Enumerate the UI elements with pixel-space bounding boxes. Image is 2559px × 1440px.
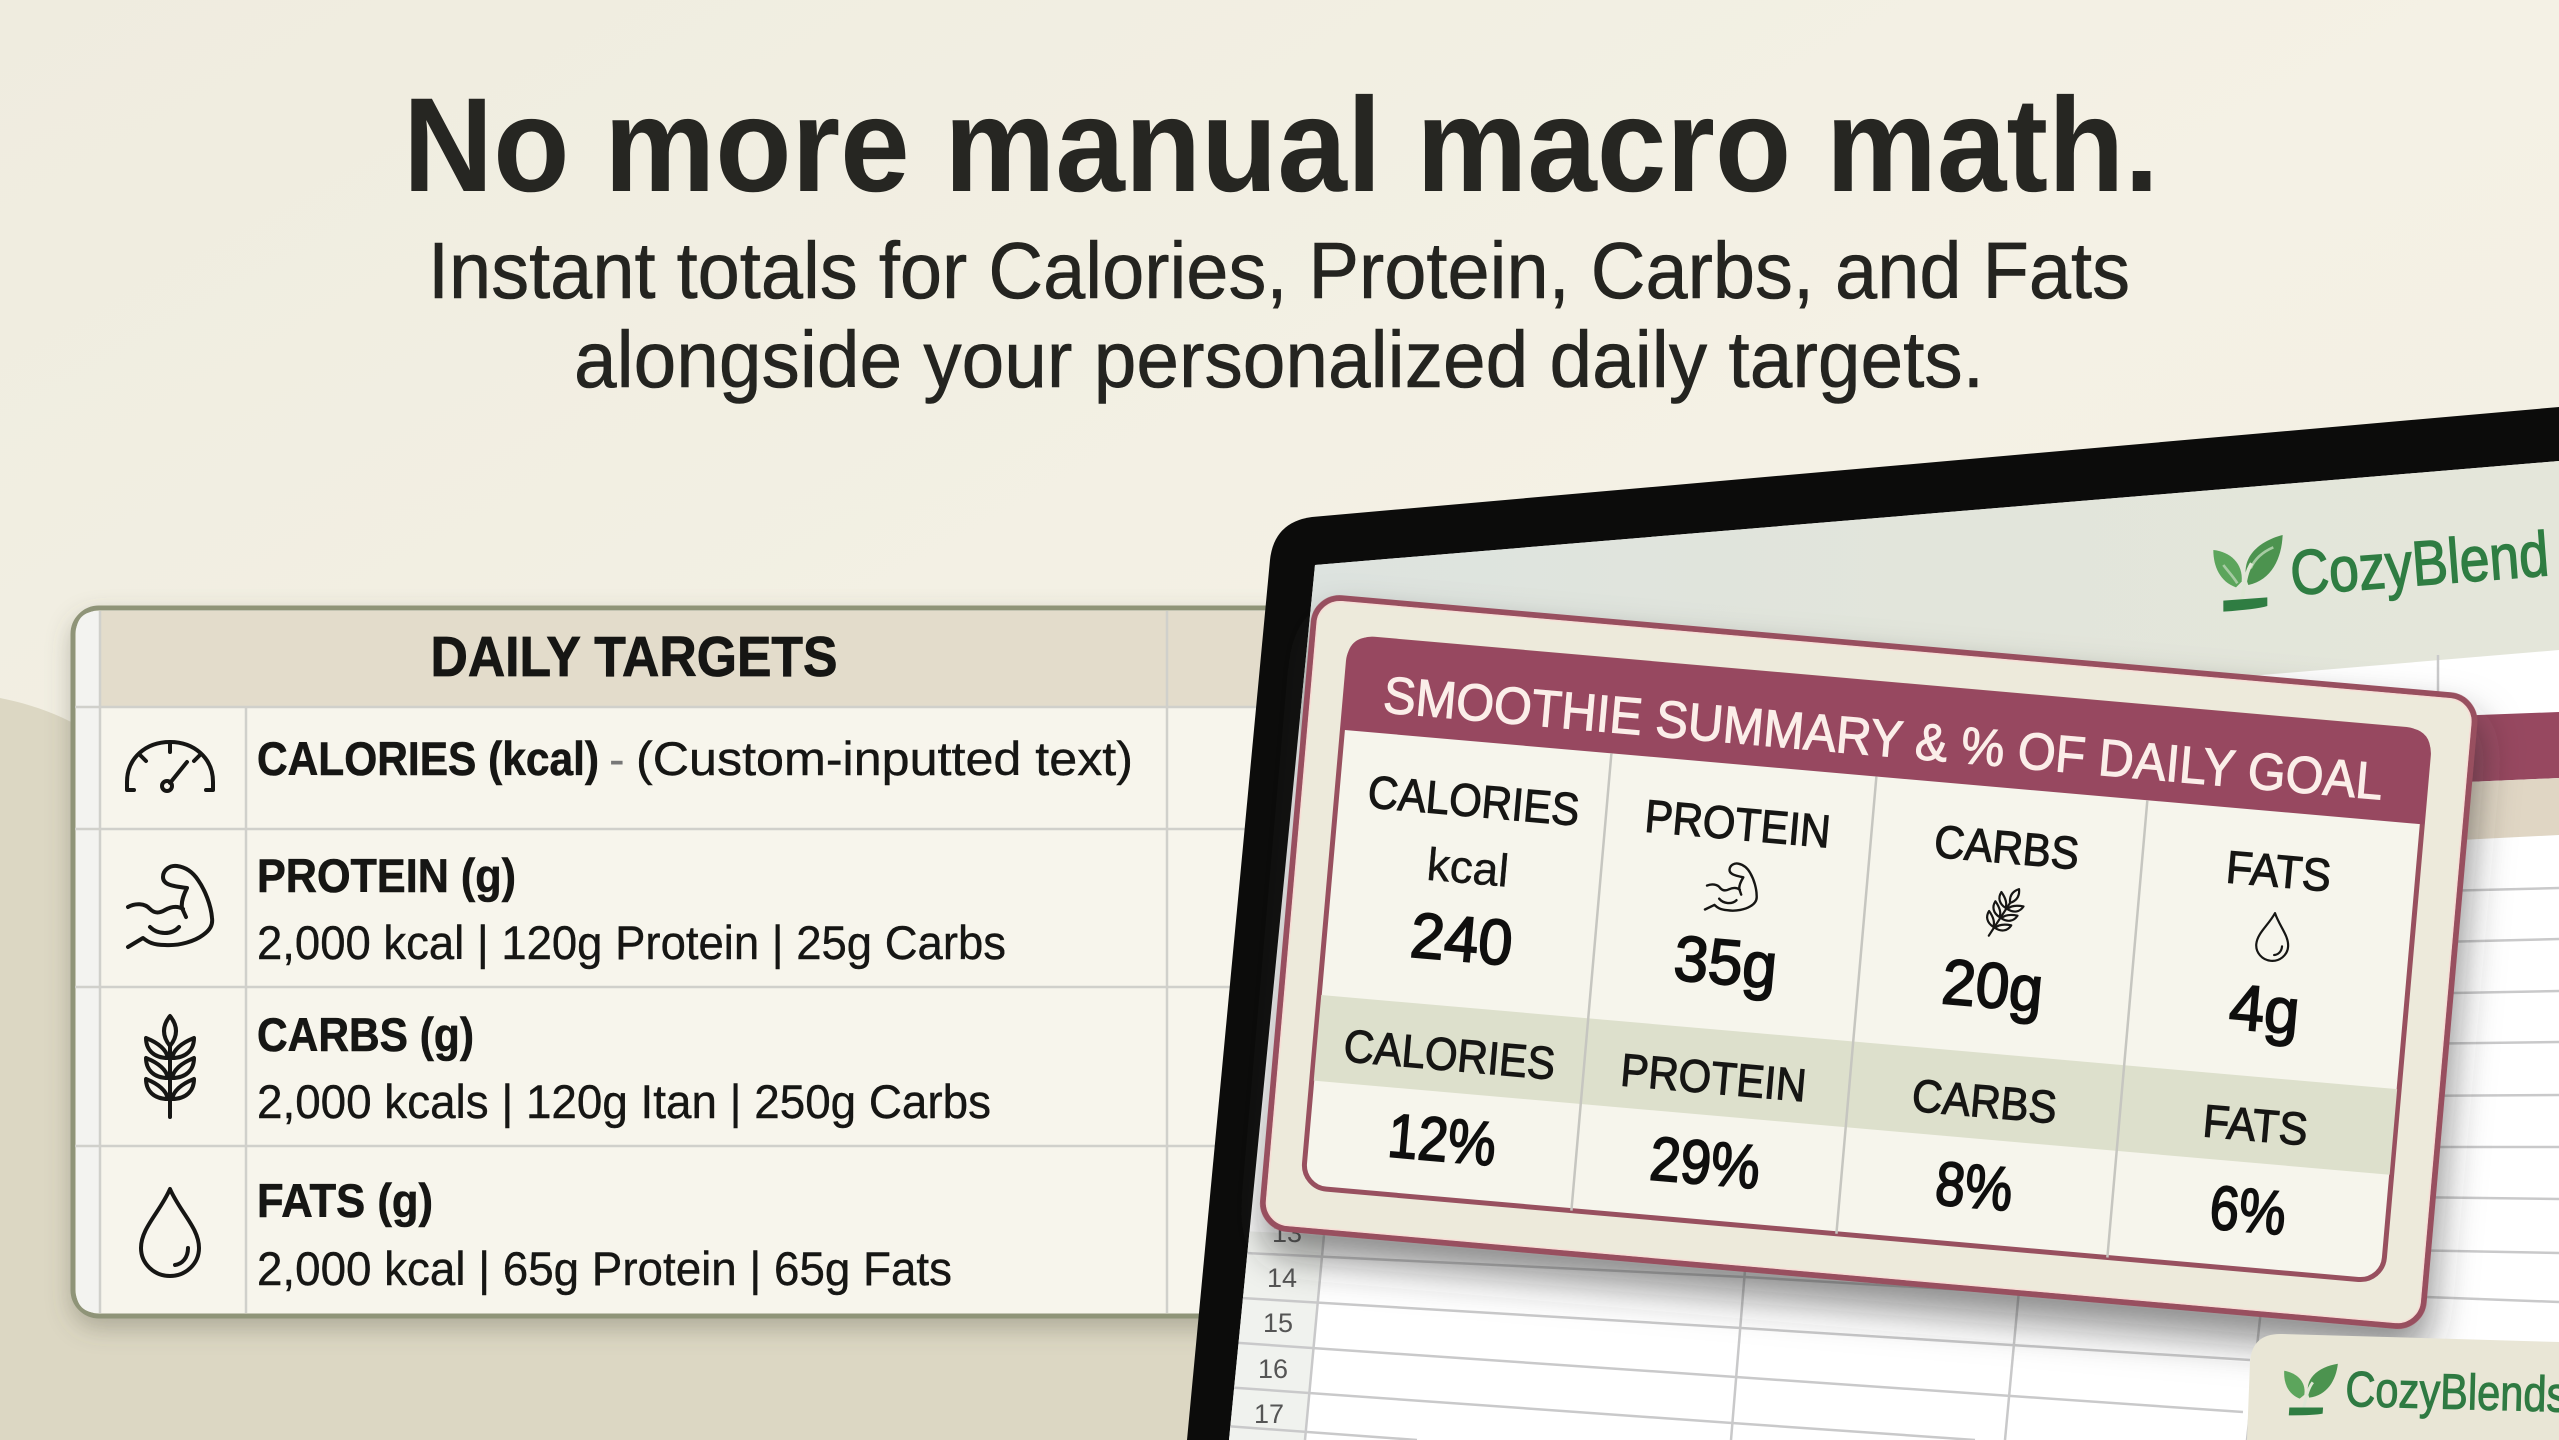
macro values — [1408, 899, 2303, 1048]
icon: small bicep — [1705, 861, 1760, 914]
row numbers: 16 — [1258, 1354, 1288, 1384]
subtitle — [428, 226, 2130, 404]
card highlight — [1265, 600, 2473, 1324]
row: calories: CALORIES (kcal) — [257, 732, 599, 785]
row: fats: FATS (g) — [257, 1174, 433, 1227]
subtitle: alongside your personalized daily targets. — [574, 315, 1984, 404]
icon: wheat — [146, 1016, 194, 1117]
column labels: PROTEIN — [1643, 790, 1833, 858]
column labels: CALORIES — [1366, 765, 1582, 836]
card heading: SMOOTHIE SUMMARY & % OF DAILY GOAL — [1381, 666, 2385, 812]
percent labels — [1342, 1019, 2310, 1155]
percent labels: CALORIES — [1342, 1019, 1557, 1090]
row: carbs — [257, 1008, 991, 1128]
percent values — [1385, 1101, 2289, 1249]
percent labels: PROTEIN — [1619, 1043, 1808, 1111]
column labels — [1360, 765, 2333, 968]
macro values: 240 — [1408, 899, 1516, 979]
row: calories — [257, 732, 1133, 785]
card body — [1261, 596, 2477, 1328]
row: protein: PROTEIN (g) — [257, 849, 516, 902]
card header — [1340, 635, 2433, 824]
panel heading: DAILY TARGETS — [430, 625, 838, 689]
column labels: kcal — [1425, 838, 1511, 897]
lower label band — [1314, 995, 2397, 1175]
row: calories: (Custom-inputted text) — [636, 732, 1133, 785]
screen header band — [1300, 455, 2559, 756]
column labels: CARBS — [1932, 815, 2081, 879]
icon: bicep — [128, 866, 212, 947]
title: No more manual macro math. — [403, 71, 2159, 220]
tablet bezel — [1187, 407, 2559, 1440]
badge body — [2247, 1334, 2559, 1440]
sheet rose band — [2472, 712, 2559, 782]
panel left stripe — [76, 611, 100, 1313]
percent values: 29% — [1647, 1124, 1763, 1203]
badge: bottom CozyBlends — [2247, 1334, 2559, 1440]
icon: small wheat — [1978, 882, 2030, 943]
row: carbs: 2,000 kcals | 120g Itan | 250g Carbs — [257, 1075, 991, 1128]
logo leaf — [2213, 535, 2283, 612]
screen sheet — [1220, 455, 2559, 1440]
percent values: 6% — [2207, 1173, 2289, 1249]
row number column — [1229, 1232, 1322, 1440]
summary card — [1261, 596, 2477, 1328]
panel: daily targets — [73, 608, 1373, 1316]
tablet screen — [1220, 455, 2559, 1440]
row: protein: 2,000 kcal | 120g Protein | 25g Carbs — [257, 916, 1006, 969]
sheet beige band — [2467, 778, 2559, 840]
percent values: 8% — [1933, 1149, 2015, 1225]
percent labels: FATS — [2201, 1094, 2310, 1155]
icon: gauge — [127, 742, 213, 791]
percent labels: CARBS — [1910, 1069, 2059, 1133]
row numbers: 13 — [1272, 1218, 1302, 1248]
macro values: 4g — [2227, 970, 2303, 1048]
icon: small drop — [2255, 912, 2291, 962]
badge leaf — [2284, 1364, 2338, 1416]
inner table — [1302, 637, 2430, 1282]
macro values: 20g — [1939, 945, 2046, 1026]
row numbers — [1256, 1228, 1301, 1423]
subtitle: Instant totals for Calories, Protein, Carbs, and Fats — [428, 226, 2130, 315]
macro values: 35g — [1671, 922, 1780, 1002]
row: carbs: CARBS (g) — [257, 1008, 474, 1061]
row numbers: 17 — [1254, 1399, 1284, 1429]
row: calories: - — [609, 732, 625, 785]
logo: top CozyBlend — [2213, 529, 2548, 612]
row: protein — [257, 849, 1006, 969]
row: fats: 2,000 kcal | 65g Protein | 65g Fats — [257, 1242, 952, 1295]
column labels: FATS — [2224, 840, 2333, 901]
panel body — [73, 608, 1373, 1316]
panel header band — [100, 611, 1370, 706]
row numbers: 14 — [1267, 1263, 1297, 1293]
background hill — [0, 698, 1320, 1440]
row numbers: 15 — [1263, 1308, 1293, 1338]
percent values: 12% — [1385, 1101, 1499, 1180]
icon: drop — [141, 1189, 199, 1276]
row: fats — [257, 1174, 952, 1295]
